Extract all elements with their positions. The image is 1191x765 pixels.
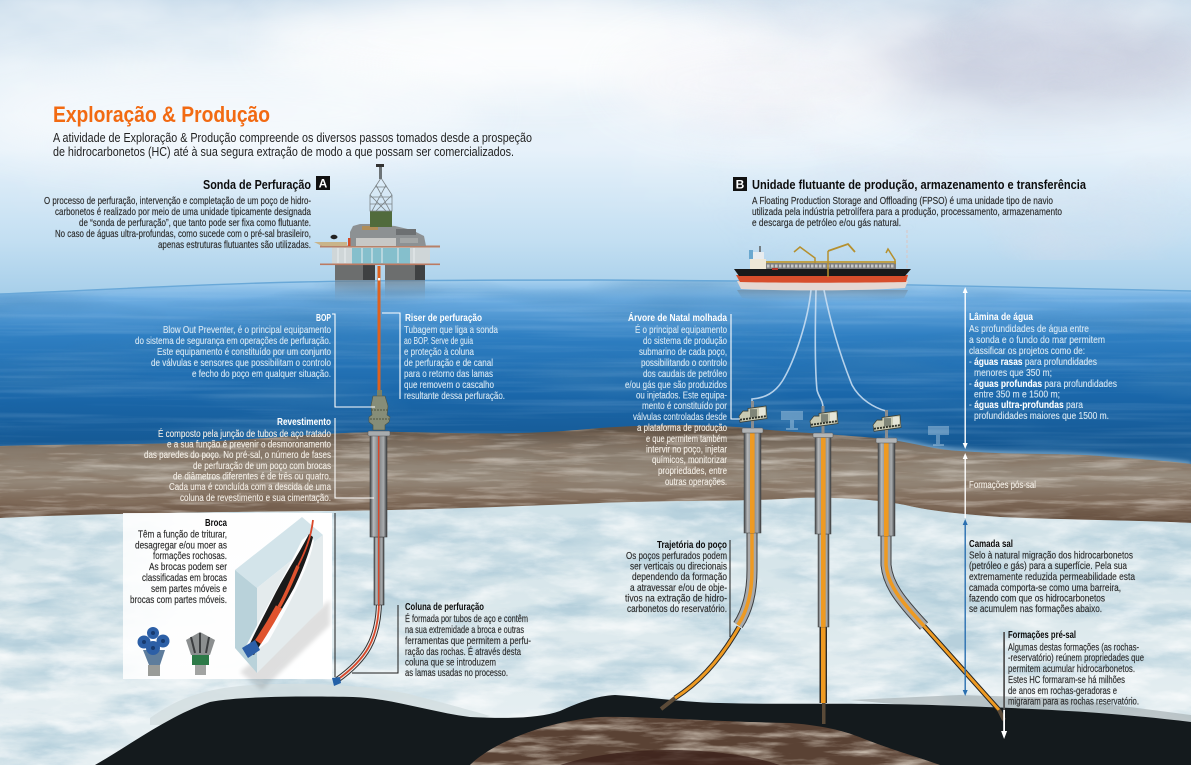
text: Lâmina de água: Lâmina de água (969, 312, 1033, 323)
text: Formações pré-sal: migraram para as rochas reservatório. (1008, 696, 1139, 708)
text: Camada sal (969, 539, 1135, 615)
text: Trajetória do poço: tivos na extração de hidro- (625, 594, 727, 604)
text: BOP: e fecho do poço em qualquer situação. (192, 369, 331, 380)
text: Coluna de perfuração: É formada por tubos de aço e contêm (405, 612, 528, 625)
text: FPSO description: e descarga de petróleo e/ou gás natural. (752, 218, 901, 229)
text: Camada sal: Selo à natural migração dos hidrocarbonetos (969, 550, 1133, 562)
text: Trajetória do poço: ser verticais ou direcionais (630, 562, 727, 572)
text: Árvore de Natal molhada (625, 311, 727, 488)
text: Broca: sem partes móveis e (151, 584, 227, 595)
text: Árvore de Natal molhada: e/ou gás que são produzidos (625, 380, 727, 391)
text: Árvore de Natal molhada: possibilitando o controlo (641, 358, 727, 369)
text: Camada sal: (petróleo e gás) para a superfície. Pela sua (969, 561, 1127, 572)
title: Exploração & Produção (53, 102, 270, 127)
text: Coluna de perfuração: ração das rochas. É através desta (405, 645, 521, 658)
text: Riser de perfuração: ao BOP. Serve de guia (404, 336, 473, 347)
well 3 (876, 438, 1004, 720)
text: Árvore de Natal molhada: dos caudais de petróleo (643, 369, 727, 380)
text: Broca: brocas com partes móveis. (130, 595, 227, 606)
text: Lâmina de água: profundidades maiores que 1500 m. (974, 411, 1109, 422)
icon: PDC bit (186, 632, 215, 675)
text: BOP: Blow Out Preventer, é o principal equipamento (163, 325, 331, 336)
heading: Unidade flutuante: Unidade flutuante de produção, armazenamento e transferência (752, 178, 1087, 192)
text: drilling rig description: de “sonda de perfuração”, que tanto pode ser fixa como flutuante. (79, 218, 311, 229)
text: Broca: classificadas em brocas (142, 573, 227, 584)
platform: drilling rig (314, 164, 440, 302)
text: drilling rig description: apenas estruturas flutuantes são utilizadas. (158, 240, 311, 251)
text: Lâmina de água: As profundidades de água entre (969, 324, 1089, 335)
text: Riser de perfuração: Riser de perfuração (405, 313, 482, 324)
wet christmas trees (739, 401, 901, 438)
text: Riser de perfuração: que removem o cascalho (404, 380, 494, 391)
text: BOP: Este equipamento é constituído por um conjunto (157, 347, 331, 358)
heading: Sonda de Perfuração: Sonda de Perfuração (203, 178, 311, 192)
text: Formações pré-sal: Algumas destas formações (as rochas- (1008, 642, 1139, 654)
text: Árvore de Natal molhada: submarino de cada poço, (639, 347, 727, 358)
text: Riser de perfuração (404, 313, 505, 402)
text: Camada sal: extremamente reduzida permeabilidade esta (969, 572, 1135, 583)
intro text (53, 131, 532, 159)
text: Lâmina de água: - águas profundas para profundidades (969, 379, 1117, 390)
text: Broca: Broca (205, 518, 227, 529)
text: Trajetória do poço: dependendo da formação (632, 572, 727, 583)
text: Coluna de perfuração: ferramentas que permitem a perfu- (405, 636, 531, 647)
text: Árvore de Natal molhada: mento é constituído por (642, 401, 727, 412)
text: Revestimento: coluna de revestimento e sua cimentação. (180, 493, 331, 504)
text: Árvore de Natal molhada: outras operações. (665, 477, 727, 488)
pre-salt formations (95, 684, 1191, 765)
text: Coluna de perfuração: as lamas usadas no processo. (405, 668, 508, 679)
text: Revestimento: Cada uma é concluída com a descida de uma (169, 482, 331, 493)
text: Revestimento: de diâmetros diferentes é de três ou quatro. (173, 472, 331, 482)
text: Lâmina de água: classificar os projetos como de: (969, 346, 1085, 357)
text: Árvore de Natal molhada: É o principal equipamento (635, 323, 727, 336)
text: Árvore de Natal molhada: a plataforma de produção (637, 423, 727, 434)
text: Camada sal: fazendo com que os hidrocarbonetos (969, 594, 1105, 604)
text: Camada sal: se acumulem nas formações abaixo. (969, 604, 1102, 615)
text: Revestimento: Revestimento (277, 417, 331, 428)
sky background with clouds (0, 0, 1191, 300)
text: Coluna de perfuração (405, 602, 531, 679)
post-salt sediment layer (0, 425, 1191, 523)
text: Broca: As brocas podem ser (149, 562, 227, 573)
panel: drill bit (123, 513, 332, 690)
text: Formações pré-sal: -reservatório) reúnem propriedades que (1008, 653, 1144, 664)
text: BOP (135, 313, 331, 380)
FPSO ship (734, 228, 911, 302)
text: BOP: do sistema de segurança em operações de perfuração. (135, 336, 331, 347)
text: Árvore de Natal molhada: intervir no poço, injetar (646, 444, 727, 456)
depth arrows (963, 287, 1007, 739)
text: Formações pré-sal: permitem acumular hidrocarbonetos. (1008, 664, 1135, 675)
text: BOP: de válvulas e sensores que possibilitam o controlo (151, 358, 331, 369)
salt layer (0, 495, 1191, 765)
intro text: A atividade de Exploração & Produção compreende os diversos passos tomados desde a prospeção (53, 131, 532, 145)
text: Coluna de perfuração: coluna que se introduzem (405, 658, 496, 668)
BOP (369, 390, 390, 430)
text: Árvore de Natal molhada: químicos, monitorizar (652, 455, 727, 466)
text: BOP: BOP (316, 313, 331, 324)
text: Revestimento: de perfuração de um poço com brocas (193, 461, 331, 472)
well A: drill string (332, 431, 390, 686)
text: Lâmina de água: - águas ultra-profundas para (969, 400, 1083, 411)
text: Riser de perfuração: e proteção à coluna (404, 347, 474, 358)
text: drilling rig description (44, 196, 311, 251)
icon: cut-away rock block (235, 517, 330, 690)
text: drilling rig description: carbonetos é realizado por meio de uma unidade tipicamente designada (55, 207, 311, 218)
text: Revestimento (144, 417, 331, 504)
text: Riser de perfuração: de perfuração e de canal (404, 358, 493, 369)
text: Trajetória do poço: carbonetos do reservatório. (627, 604, 727, 615)
text: Formações pré-sal: de anos em rochas-geradoras e (1008, 686, 1117, 697)
icon: roller cone bit (138, 627, 170, 676)
text: Lâmina de água: menores que 350 m; (974, 368, 1052, 379)
text: drilling rig description: No caso de águas ultra-profundas, como sucede com o pré-sal brasileiro, (55, 229, 311, 240)
leader lines (332, 313, 740, 498)
text: Árvore de Natal molhada: ou injetados. Este equipa- (636, 390, 727, 402)
text: Riser de perfuração: resultante dessa perfuração. (404, 391, 505, 402)
text: Broca: Têm a função de triturar, (138, 530, 227, 540)
intro text: de hidrocarbonetos (HC) até à sua segura extração de modo a que possam ser comercializados. (53, 145, 514, 159)
text: FPSO description: A Floating Production Storage and Offloading (FPSO) é uma unidade tipo de navio (752, 196, 1053, 207)
text: Formações pré-sal: Estes HC formaram-se há milhões (1008, 675, 1125, 686)
text: Formações pós-sal: Formações pós-sal (969, 480, 1036, 491)
text: Broca (130, 518, 227, 606)
text: Trajetória do poço: Trajetória do poço (657, 540, 727, 551)
well 1 (661, 428, 763, 709)
text: Broca: desagregar e/ou moer as (135, 540, 227, 552)
text: Árvore de Natal molhada: e que permitem também (646, 434, 727, 445)
text: Revestimento: e a sua função é prevenir o desmoronamento (167, 440, 331, 450)
text: Broca: formações rochosas. (153, 551, 227, 562)
text: Trajetória do poço: a atravessar e/ou de obje- (630, 583, 727, 594)
text: Lâmina de água: - águas rasas para profundidades (969, 357, 1097, 368)
text: Riser de perfuração: para o retorno das lamas (404, 369, 493, 380)
text: Riser de perfuração: Tubagem que liga a sonda (404, 325, 498, 336)
text: Lâmina de água: a sonda e o fundo do mar permitem (969, 335, 1105, 346)
umbilicals from FPSO to wet trees (752, 290, 886, 415)
text: Revestimento: das paredes do poço. No pré-sal, o número de fases (144, 450, 331, 461)
text: drilling rig description: O processo de perfuração, intervenção e completação de um poço de hidro- (44, 196, 311, 207)
heading: Unidade flutuante: B (736, 178, 745, 192)
text: Árvore de Natal molhada: Árvore de Natal molhada (628, 311, 727, 324)
text: Árvore de Natal molhada: propriedades, entre (658, 466, 727, 477)
text: Coluna de perfuração: na sua extremidade a broca e outras (405, 625, 524, 636)
text: Coluna de perfuração: Coluna de perfuração (405, 602, 484, 613)
text: Árvore de Natal molhada: do sistema de produção (643, 336, 727, 347)
riser (378, 266, 380, 390)
text: Lâmina de água: entre 350 m e 1500 m; (974, 390, 1060, 400)
faint background wet trees (781, 411, 949, 446)
text: Trajetória do poço (625, 540, 727, 615)
text: Lâmina de água (969, 312, 1117, 422)
text: Formações pré-sal (1008, 630, 1144, 708)
text: Formações pré-sal: Formações pré-sal (1008, 630, 1076, 641)
well 2 (813, 433, 833, 724)
sea water (0, 275, 1191, 470)
text: Camada sal: camada comporta-se como uma barreira, (969, 583, 1121, 594)
text: Revestimento: É composto pela junção de tubos de aço tratado (158, 427, 331, 440)
text: FPSO description (752, 196, 1062, 229)
text: FPSO description: utilizada pela indústria petrolífera para a produção, processamento, armazenamento (752, 207, 1062, 218)
heading: Sonda de Perfuração: A (319, 176, 328, 190)
text: Árvore de Natal molhada: válvulas controladas desde (633, 412, 727, 423)
text: Camada sal: Camada sal (969, 539, 1013, 550)
text: Trajetória do poço: Os poços perfurados podem (626, 551, 727, 562)
